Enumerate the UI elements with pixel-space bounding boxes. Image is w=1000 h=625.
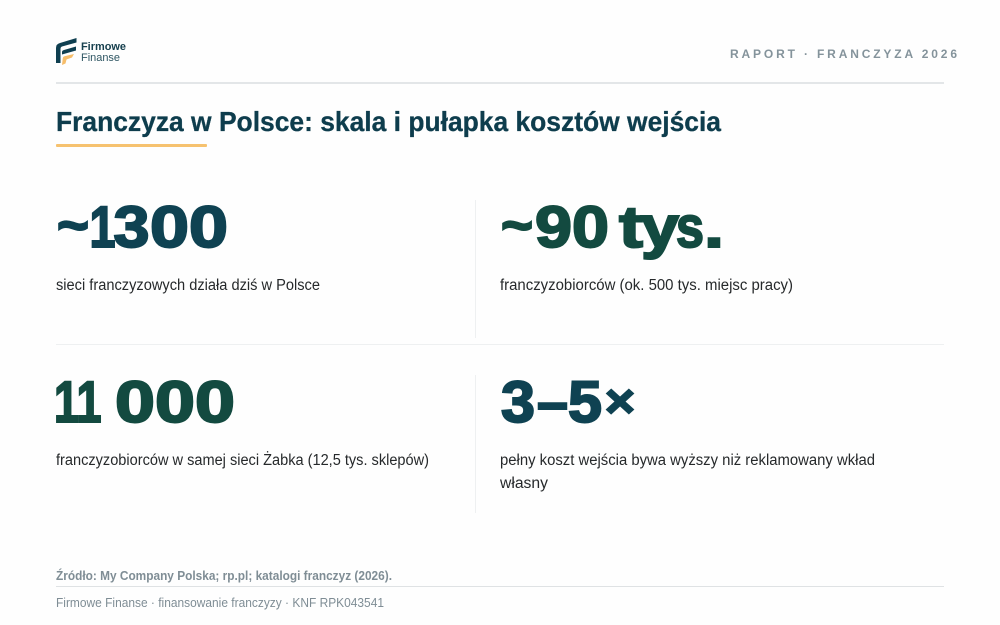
- icon: logo mark: [56, 38, 76, 65]
- stat value: 1: [90, 195, 116, 260]
- stat value: 1: [76, 370, 102, 435]
- stat value: ~: [57, 193, 89, 256]
- stat value: ×: [605, 375, 635, 427]
- stat value: y: [641, 195, 679, 260]
- stat value: 5: [568, 370, 602, 435]
- stat value: 1: [54, 370, 79, 435]
- title: Franczyza w Polsce: skala i pułapka kosztów wejścia: [56, 106, 722, 137]
- stat: true entry cost multiple: [499, 370, 875, 492]
- stat: number of franchise networks: [56, 193, 320, 294]
- stat value: 3: [114, 195, 150, 260]
- source note: Źródło: My Company Polska; rp.pl; katalogi franczyz (2026).: [56, 568, 392, 583]
- stat value: 3: [501, 370, 535, 435]
- stat: true entry cost multiple: własny: [499, 475, 548, 492]
- stat value: 90: [535, 195, 609, 260]
- logo wordmark: Firmowe: [81, 41, 126, 53]
- stat: Żabka franchisees: [54, 370, 429, 469]
- header: logo: [56, 38, 126, 65]
- stat description: franczyzobiorców w samej sieci Żabka (12,5 tys. sklepów): [56, 451, 429, 469]
- stat value: –: [537, 370, 568, 435]
- stat value: t: [619, 195, 643, 260]
- stat value: 000: [115, 370, 235, 435]
- stat: number of franchisees: [500, 193, 793, 294]
- stat value: ~: [501, 193, 533, 256]
- stat value: .: [704, 195, 724, 260]
- logo wordmark: Finanse: [81, 52, 120, 64]
- header: report label: RAPORT · FRANCZYZA 2026: [730, 47, 957, 61]
- stat value: 00: [150, 195, 228, 260]
- logo wordmark: [81, 41, 126, 64]
- footer: Firmowe Finanse · finansowanie franczyzy · KNF RPK043541: [56, 596, 384, 610]
- stat description: franczyzobiorców (ok. 500 tys. miejsc pracy): [500, 277, 793, 294]
- stat value: s: [676, 195, 704, 260]
- title accent underline: [56, 144, 207, 147]
- stat description: pełny koszt wejścia bywa wyższy niż reklamowany wkład: [500, 452, 875, 469]
- stat description: sieci franczyzowych działa dziś w Polsce: [56, 277, 320, 294]
